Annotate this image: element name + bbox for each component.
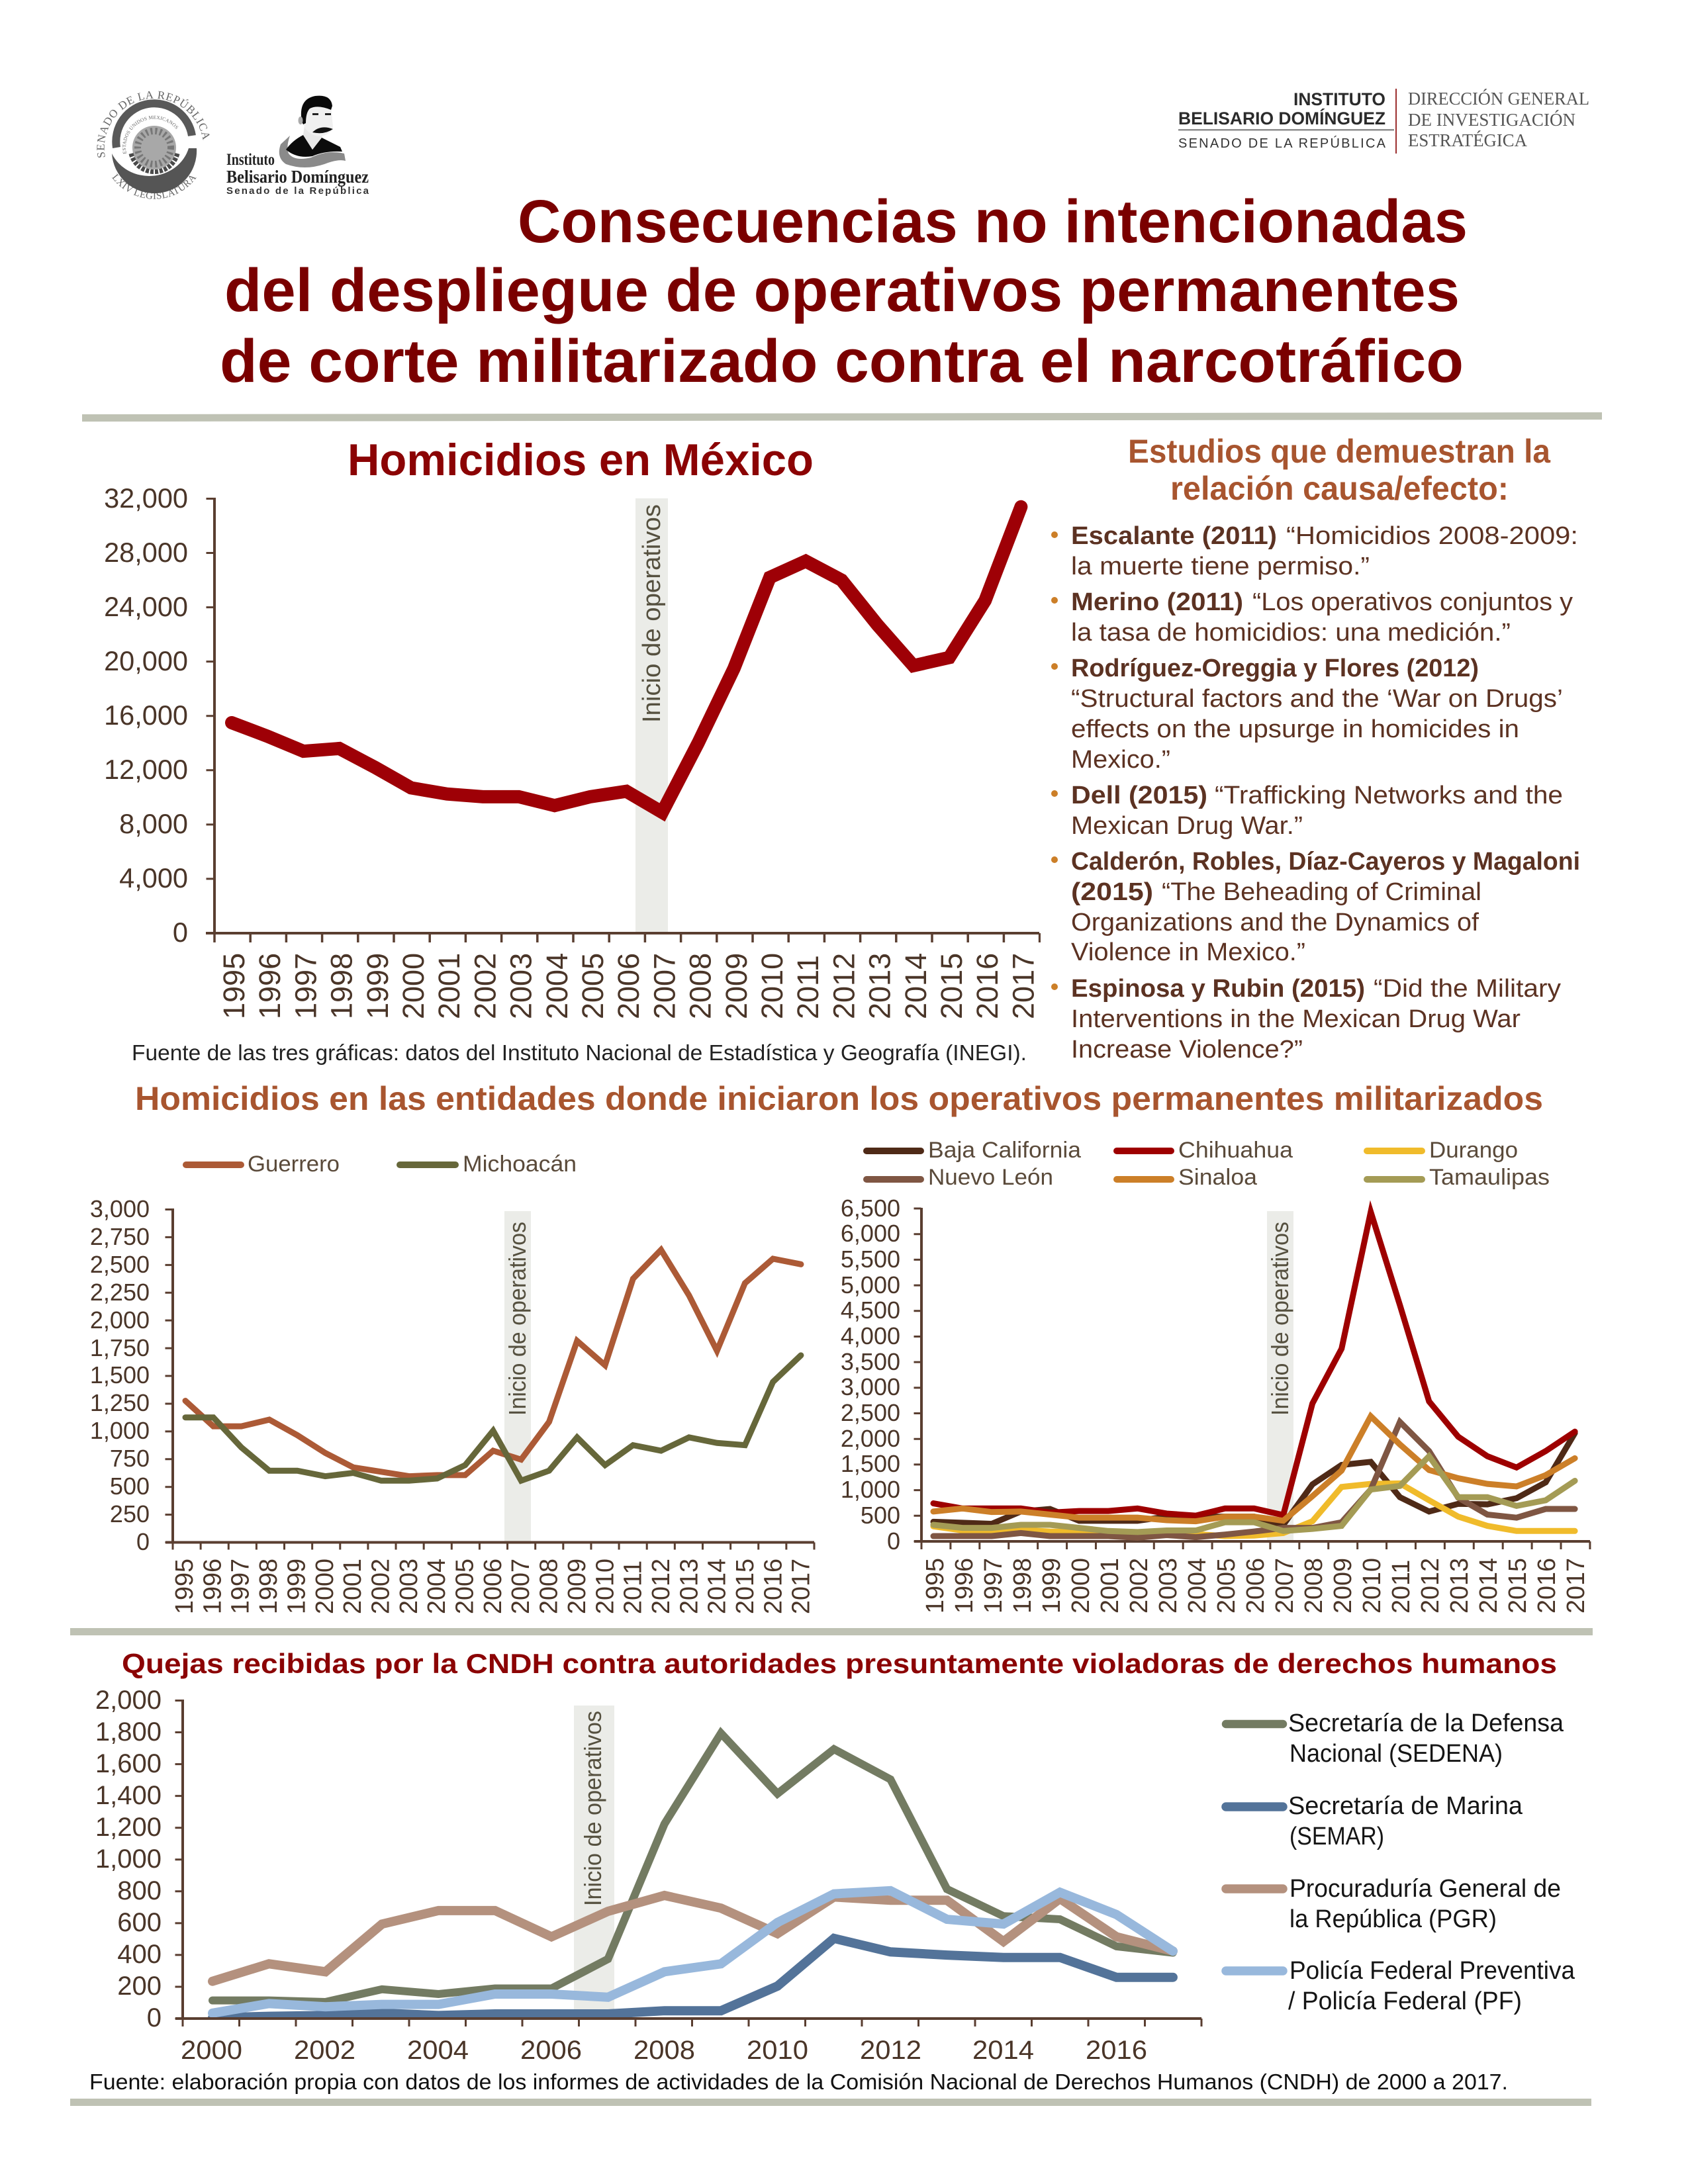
panel: estudios causa/efecto: “Structural factors and the ‘War on Drugs’ xyxy=(1071,685,1563,713)
chart: seis entidades: 2012 xyxy=(1417,1558,1444,1614)
panel: estudios causa/efecto: relación causa/efecto: xyxy=(1170,470,1509,507)
chart: quejas CNDH: 2,000 xyxy=(95,1686,162,1715)
logo: Instituto Belisario Domínguez wordmark: ESTRATÉGICA xyxy=(1408,130,1527,150)
panel: estudios causa/efecto: Increase Violence?” xyxy=(1071,1036,1303,1064)
chart: seis entidades: 0 xyxy=(887,1527,900,1555)
chart: Homicidios en México xyxy=(104,482,1041,1019)
chart: Homicidios en México: 2001 xyxy=(432,953,466,1019)
chart: Guerrero y Michoacán: 250 xyxy=(110,1500,150,1527)
panel: estudios causa/efecto: Mexico.” xyxy=(1071,746,1170,774)
chart: Guerrero y Michoacán: 1996 xyxy=(199,1559,226,1614)
chart: seis entidades: 2002 xyxy=(1125,1558,1153,1614)
chart: seis entidades: 500 xyxy=(861,1502,900,1529)
chart: seis entidades: 2013 xyxy=(1446,1558,1474,1614)
logo: Instituto Belisario Domínguez wordmark: DE INVESTIGACIÓN xyxy=(1408,110,1575,130)
chart: Homicidios en México: 1995 xyxy=(217,953,251,1019)
chart: Guerrero y Michoacán: 2005 xyxy=(451,1559,479,1614)
chart: seis entidades: 4,000 xyxy=(841,1322,900,1349)
chart: seis entidades: Inicio de operativos xyxy=(1266,1222,1293,1416)
chart: Guerrero y Michoacán: 2015 xyxy=(731,1559,759,1614)
chart: Guerrero y Michoacán: 2006 xyxy=(479,1559,507,1614)
chart: seis entidades: 1998 xyxy=(1009,1558,1037,1614)
chart: Homicidios en México: 2008 xyxy=(684,953,718,1019)
chart: Homicidios en México: 1999 xyxy=(361,953,395,1019)
chart: Guerrero y Michoacán: 2007 xyxy=(507,1559,535,1614)
chart: Homicidios en México: 2003 xyxy=(504,953,538,1019)
panel: estudios causa/efecto: (2015) xyxy=(1071,878,1153,906)
chart: seis entidades: 1999 xyxy=(1038,1558,1066,1614)
chart: seis entidades: 3,000 xyxy=(841,1373,900,1400)
logo: Instituto Belisario Domínguez portrait and name: Senado de la República xyxy=(226,185,369,197)
panel: estudios causa/efecto: Merino (2011) xyxy=(1071,588,1243,616)
logo: Instituto Belisario Domínguez wordmark: SENADO DE LA REPÚBLICA xyxy=(1178,136,1386,151)
panel: estudios causa/efecto: “Did the Military xyxy=(1374,975,1561,1003)
chart: seis entidades: 2000 xyxy=(1067,1558,1095,1614)
chart: quejas CNDH: 800 xyxy=(117,1876,162,1905)
logo: Senado de la República seal: LXIV LEGISLATURA xyxy=(112,173,197,199)
chart: quejas CNDH: 1,600 xyxy=(95,1749,162,1778)
legend: Guerrero y Michoacán: Michoacán xyxy=(463,1152,577,1177)
chart: Homicidios en México: 2005 xyxy=(576,953,610,1019)
chart: Guerrero y Michoacán: 2013 xyxy=(675,1559,703,1614)
chart: Guerrero y Michoacán: 2012 xyxy=(647,1559,675,1614)
chart: Homicidios en México: 2009 xyxy=(720,953,753,1019)
chart: quejas CNDH: 1,400 xyxy=(95,1781,162,1810)
panel: estudios causa/efecto: la tasa de homicidios: una medición.” xyxy=(1071,619,1511,647)
chart: Homicidios en México: 28,000 xyxy=(104,537,188,568)
panel: estudios causa/efecto: Dell (2015) xyxy=(1071,782,1207,809)
legend: autoridades: la República (PGR) xyxy=(1289,1905,1497,1933)
chart: quejas CNDH: 2004 xyxy=(407,2036,469,2065)
chart: Guerrero y Michoacán: 0 xyxy=(136,1528,150,1555)
chart: seis entidades: 2008 xyxy=(1300,1558,1328,1614)
chart: quejas CNDH: 2010 xyxy=(747,2036,808,2065)
chart: Guerrero y Michoacán: 2004 xyxy=(423,1559,451,1614)
chart: Guerrero y Michoacán: 2009 xyxy=(563,1559,591,1614)
chart: seis entidades: 6,500 xyxy=(841,1195,900,1222)
chart: Guerrero y Michoacán: 1,000 xyxy=(90,1417,150,1444)
chart: seis entidades: 2009 xyxy=(1329,1558,1357,1614)
chart: quejas CNDH: 2012 xyxy=(860,2036,921,2065)
legend: Guerrero y Michoacán xyxy=(186,1152,577,1177)
legend: autoridades: Secretaría de Marina xyxy=(1288,1792,1523,1820)
panel: estudios causa/efecto: “Homicidios 2008-2009: xyxy=(1286,522,1578,550)
chart: Homicidios en México: Inicio de operativos xyxy=(638,504,666,723)
chart: seis entidades: 4,500 xyxy=(841,1297,900,1324)
chart: Guerrero y Michoacán: 2014 xyxy=(704,1559,731,1614)
logo: Senado de la República seal: SENADO DE LA REPÚBLICA xyxy=(97,91,209,158)
chart: quejas CNDH: 0 xyxy=(147,2003,162,2032)
chart: Homicidios en México: 4,000 xyxy=(119,862,188,893)
chart: seis entidades: 2007 xyxy=(1271,1558,1299,1614)
logo: Instituto Belisario Domínguez portrait and name: Instituto xyxy=(226,151,275,169)
chart: quejas CNDH: 2016 xyxy=(1086,2036,1147,2065)
chart: Guerrero y Michoacán: 2016 xyxy=(759,1559,787,1614)
title: Consecuencias no intencionadas xyxy=(518,188,1468,255)
chart: Guerrero y Michoacán: 1995 xyxy=(171,1559,199,1614)
panel: estudios causa/efecto: Organizations and the Dynamics of xyxy=(1071,909,1479,936)
chart: seis entidades: 2011 xyxy=(1387,1560,1415,1614)
chart: seis entidades xyxy=(841,1195,1591,1614)
chart: Homicidios en México: 8,000 xyxy=(119,808,188,839)
chart: Guerrero y Michoacán: 2001 xyxy=(339,1559,367,1614)
logo: Instituto Belisario Domínguez portrait and name xyxy=(226,96,369,197)
panel: estudios causa/efecto: effects on the upsurge in homicides in xyxy=(1071,715,1519,743)
chart: Homicidios en México: 1998 xyxy=(325,953,359,1019)
chart: seis entidades: 3,500 xyxy=(841,1348,900,1375)
chart: Homicidios en México: 2004 xyxy=(540,953,574,1019)
chart: quejas CNDH: 200 xyxy=(117,1972,162,2001)
legend: autoridades: Procuraduría General de xyxy=(1289,1875,1561,1903)
logo: Instituto Belisario Domínguez wordmark xyxy=(1178,89,1589,154)
chart: Homicidios en México: 2015 xyxy=(935,953,968,1019)
panel: estudios causa/efecto: la muerte tiene permiso.” xyxy=(1071,553,1370,580)
chart: quejas CNDH: 400 xyxy=(117,1940,162,1969)
chart: seis entidades: 2,500 xyxy=(841,1399,900,1426)
chart: quejas CNDH: 1,200 xyxy=(95,1813,162,1842)
logo: Senado de la República seal xyxy=(97,91,209,199)
chart: Guerrero y Michoacán: 1,500 xyxy=(90,1361,150,1388)
chart: seis entidades: 2006 xyxy=(1242,1558,1270,1614)
legend: autoridades: (SEMAR) xyxy=(1289,1823,1384,1850)
chart: quejas CNDH: 2008 xyxy=(633,2036,695,2065)
chart: Guerrero y Michoacán: 1,750 xyxy=(90,1334,150,1361)
chart: Homicidios en México: 24,000 xyxy=(104,591,188,622)
chart: Guerrero y Michoacán: 500 xyxy=(110,1473,150,1500)
chart: Homicidios en México: 2002 xyxy=(468,953,502,1019)
chart: Homicidios en México: 2006 xyxy=(612,953,645,1019)
chart: Homicidios en México: 0 xyxy=(173,917,188,948)
chart: seis entidades: 2010 xyxy=(1358,1558,1386,1614)
chart: Homicidios en México: 2013 xyxy=(863,953,897,1019)
chart: quejas CNDH: 2000 xyxy=(181,2036,242,2065)
panel: estudios causa/efecto: “The Beheading of Criminal xyxy=(1162,878,1481,906)
logo: Instituto Belisario Domínguez portrait and name: Belisario Domínguez xyxy=(226,167,369,187)
chart: Homicidios en México: 32,000 xyxy=(104,482,188,514)
chart: Guerrero y Michoacán: 2008 xyxy=(536,1559,563,1614)
legend: seis entidades xyxy=(867,1138,1550,1190)
chart: Homicidios en México: 2000 xyxy=(397,953,430,1019)
panel: estudios causa/efecto: Interventions in the Mexican Drug War xyxy=(1071,1005,1521,1033)
panel: estudios causa/efecto: Calderón, Robles, Díaz-Cayeros y Magaloni xyxy=(1071,848,1580,876)
chart: Guerrero y Michoacán: 1,250 xyxy=(90,1389,150,1416)
panel: estudios causa/efecto: Estudios que demuestran la xyxy=(1128,433,1551,470)
legend: autoridades: Policía Federal Preventiva xyxy=(1289,1957,1575,1985)
chart: Guerrero y Michoacán: Inicio de operativos xyxy=(504,1222,531,1416)
logo: Instituto Belisario Domínguez wordmark: BELISARIO DOMÍNGUEZ xyxy=(1178,108,1385,128)
chart: seis entidades: 6,000 xyxy=(841,1220,900,1247)
title xyxy=(220,188,1468,395)
chart: quejas CNDH: 2014 xyxy=(972,2036,1034,2065)
chart: seis entidades: 1,000 xyxy=(841,1476,900,1503)
chart: Homicidios en México: 1997 xyxy=(289,953,322,1019)
chart: Homicidios en México: 2012 xyxy=(827,953,861,1019)
legend: seis entidades: Baja California xyxy=(928,1138,1081,1163)
chart: quejas CNDH: 1,800 xyxy=(95,1717,162,1747)
chart: seis entidades: 2005 xyxy=(1213,1558,1241,1614)
chart: Homicidios en México: 2007 xyxy=(647,953,681,1019)
chart: Guerrero y Michoacán: 3,000 xyxy=(90,1195,150,1222)
chart: Homicidios en México: 1996 xyxy=(253,953,287,1019)
legend: Guerrero y Michoacán: Guerrero xyxy=(248,1152,340,1177)
panel: estudios causa/efecto: Espinosa y Rubin (2015) xyxy=(1071,975,1365,1003)
panel: estudios causa/efecto: Mexican Drug War.” xyxy=(1071,812,1303,840)
chart: seis entidades: 5,000 xyxy=(841,1271,900,1298)
chart: Guerrero y Michoacán: 2002 xyxy=(367,1559,395,1614)
chart: Guerrero y Michoacán: 2003 xyxy=(395,1559,423,1614)
chart: quejas CNDH: 2006 xyxy=(520,2036,582,2065)
chart: seis entidades: 2017 xyxy=(1562,1558,1590,1614)
chart: Guerrero y Michoacán: 1999 xyxy=(283,1559,310,1614)
logo: Instituto Belisario Domínguez wordmark: DIRECCIÓN GENERAL xyxy=(1408,89,1589,109)
chart: Guerrero y Michoacán: 2011 xyxy=(620,1561,647,1614)
chart: quejas CNDH: 2002 xyxy=(294,2036,355,2065)
legend: seis entidades: Nuevo León xyxy=(928,1165,1053,1190)
legend: seis entidades: Sinaloa xyxy=(1178,1165,1257,1190)
chart: seis entidades: 1995 xyxy=(921,1558,949,1614)
chart: quejas CNDH: 600 xyxy=(117,1908,162,1937)
chart: quejas CNDH xyxy=(95,1686,1203,2065)
chart: seis entidades: 2016 xyxy=(1533,1558,1561,1614)
chart: seis entidades: 2014 xyxy=(1475,1558,1503,1614)
chart: Guerrero y Michoacán: 2,500 xyxy=(90,1251,150,1278)
chart: Homicidios en México: 16,000 xyxy=(104,700,188,731)
chart: quejas CNDH: Inicio de operativos xyxy=(579,1711,606,1906)
chart: Homicidios en México: 2014 xyxy=(899,953,933,1019)
panel: estudios causa/efecto xyxy=(1051,433,1580,1064)
legend: autoridades: Nacional (SEDENA) xyxy=(1289,1740,1503,1768)
chart: Guerrero y Michoacán: 750 xyxy=(110,1445,150,1472)
logo: Senado de la República seal: ESTADOS UNIDOS MEXICANOS xyxy=(122,115,179,154)
chart: Guerrero y Michoacán: 1997 xyxy=(227,1559,255,1614)
chart: seis entidades: 2004 xyxy=(1184,1558,1211,1614)
logo: Instituto Belisario Domínguez wordmark: INSTITUTO xyxy=(1293,89,1385,109)
chart: Homicidios en México: 20,000 xyxy=(104,645,188,676)
heading: Homicidios en México: Homicidios en México xyxy=(348,435,814,485)
chart: seis entidades: 1997 xyxy=(980,1558,1008,1614)
chart: Guerrero y Michoacán: 2,750 xyxy=(90,1223,150,1250)
legend: autoridades: / Policía Federal (PF) xyxy=(1288,1987,1522,2015)
chart: Guerrero y Michoacán: 2,000 xyxy=(90,1306,150,1334)
heading: homicidios en las entidades: Homicidios en las entidades donde iniciaron los operativos permanentes militarizados xyxy=(135,1080,1543,1117)
chart: seis entidades: 1,500 xyxy=(841,1450,900,1477)
legend: seis entidades: Tamaulipas xyxy=(1429,1165,1550,1190)
source note: CNDH: Fuente: elaboración propia con datos de los informes de actividades de la Comisión Nacional de Derechos Humanos (CNDH) de 2000 a 2017. xyxy=(89,2070,1508,2094)
chart: Homicidios en México: 2010 xyxy=(755,953,789,1019)
legend: autoridades xyxy=(1226,1709,1575,2015)
chart: Homicidios en México: 12,000 xyxy=(104,754,188,785)
panel: estudios causa/efecto: Rodríguez-Oreggia y Flores (2012) xyxy=(1071,655,1479,682)
chart: Homicidios en México: 2011 xyxy=(791,955,825,1019)
chart: Guerrero y Michoacán: 2,250 xyxy=(90,1279,150,1306)
chart: Homicidios en México: 2017 xyxy=(1006,953,1040,1019)
chart: Guerrero y Michoacán: 1998 xyxy=(255,1559,283,1614)
chart: seis entidades: 1996 xyxy=(951,1558,978,1614)
chart: seis entidades: 2001 xyxy=(1096,1558,1124,1614)
chart: seis entidades: 2003 xyxy=(1154,1558,1182,1614)
chart: seis entidades: 5,500 xyxy=(841,1246,900,1273)
title: del despliegue de operativos permanentes xyxy=(224,257,1460,324)
chart: Guerrero y Michoacán xyxy=(90,1195,816,1614)
chart: Guerrero y Michoacán: 2010 xyxy=(591,1559,619,1614)
title: de corte militarizado contra el narcotráfico xyxy=(220,328,1464,395)
chart: Homicidios en México: 2016 xyxy=(970,953,1004,1019)
chart: Guerrero y Michoacán: 2000 xyxy=(311,1559,339,1614)
legend: seis entidades: Chihuahua xyxy=(1178,1138,1293,1163)
panel: estudios causa/efecto: “Trafficking Networks and the xyxy=(1215,782,1563,809)
chart: seis entidades: 2015 xyxy=(1504,1558,1532,1614)
chart: seis entidades: 2,000 xyxy=(841,1425,900,1452)
source note: INEGI: Fuente de las tres gráficas: datos del Instituto Nacional de Estadística y Geografía (INEGI). xyxy=(132,1040,1027,1065)
chart: quejas CNDH: 1,000 xyxy=(95,1844,162,1874)
panel: estudios causa/efecto: Escalante (2011) xyxy=(1071,522,1277,550)
heading: quejas CNDH: Quejas recibidas por la CNDH contra autoridades presuntamente violadoras de derechos humanos xyxy=(122,1648,1557,1679)
panel: estudios causa/efecto: Violence in Mexico.” xyxy=(1071,938,1305,966)
panel: estudios causa/efecto: “Los operativos conjuntos y xyxy=(1252,588,1573,616)
chart: Guerrero y Michoacán: 2017 xyxy=(788,1559,816,1614)
legend: autoridades: Secretaría de la Defensa xyxy=(1288,1709,1564,1737)
legend: seis entidades: Durango xyxy=(1429,1138,1518,1163)
